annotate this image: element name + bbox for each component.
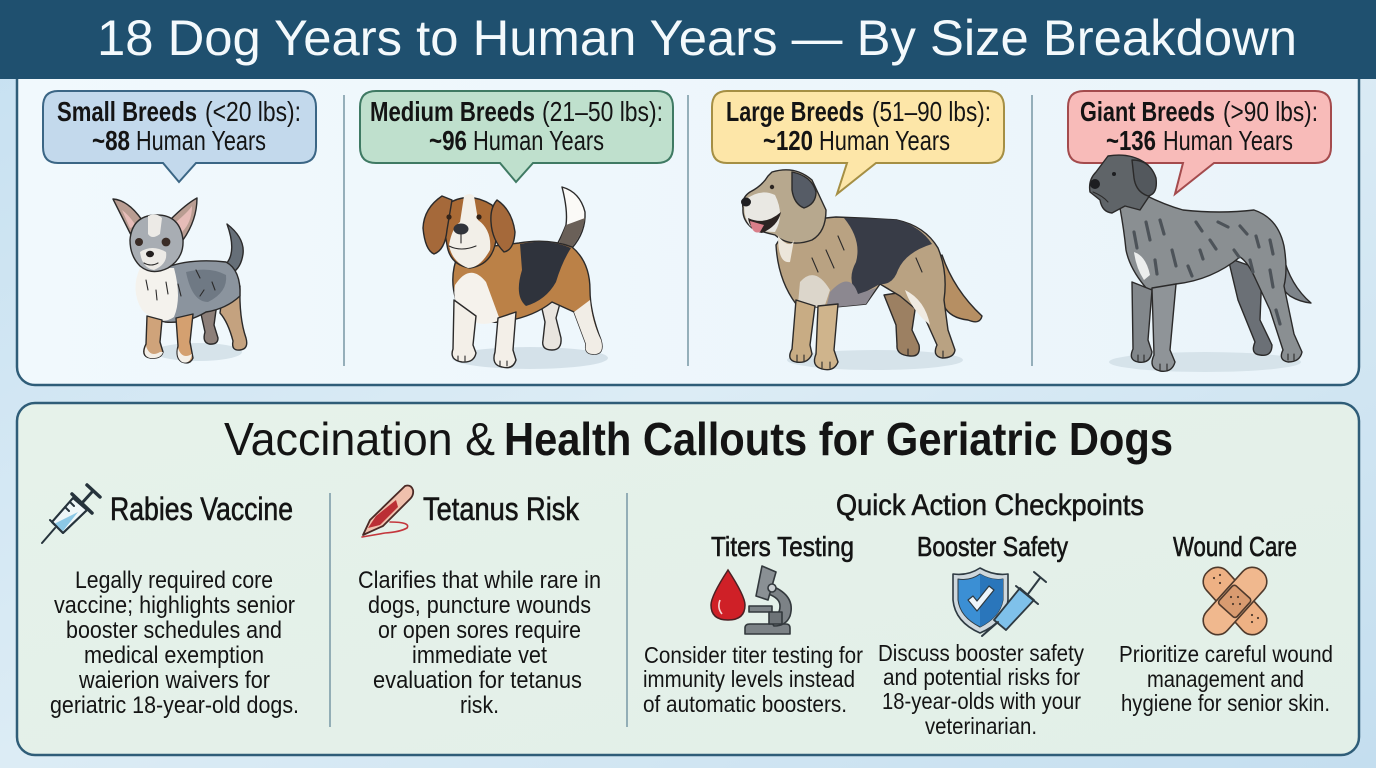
large breed bubble: Human Years [819, 125, 950, 156]
large breed bubble: Large Breeds [726, 96, 864, 127]
medium breed bubble [360, 91, 673, 182]
rabies text [50, 567, 299, 719]
giant breed bubble: Giant Breeds [1080, 96, 1215, 127]
panel heading [224, 413, 1173, 465]
title: 18 Dog Years to Human Years — By Size Breakdown [97, 10, 1297, 66]
wound care text [1119, 641, 1333, 716]
icon: tetanus wound [362, 486, 413, 537]
tetanus text: dogs, puncture wounds [368, 592, 591, 619]
wound care heading: Wound Care [1173, 531, 1297, 562]
booster safety heading: Booster Safety [917, 531, 1068, 562]
icon: blood drop [711, 570, 745, 620]
large breed bubble [712, 91, 1004, 194]
medium breed bubble: ~96 [429, 125, 467, 156]
booster text: and potential risks for [883, 664, 1080, 690]
icon: shield and syringe [953, 568, 1046, 636]
panel heading: Health Callouts for Geriatric Dogs [504, 413, 1173, 465]
icon: medium dog (beagle) [423, 187, 608, 369]
panel heading: Vaccination & [224, 413, 495, 465]
icon: rabies syringe [42, 485, 100, 543]
giant breed bubble: ~136 [1106, 125, 1156, 156]
tetanus text: evaluation for tetanus [373, 667, 582, 694]
wound care text: management and [1147, 666, 1304, 692]
large breed bubble: ~120 [763, 125, 813, 156]
booster text: 18-year-olds with your [882, 688, 1081, 714]
icon: microscope [745, 566, 791, 634]
rabies text: booster schedules and [66, 617, 282, 644]
giant breed bubble [1068, 91, 1331, 194]
small breed bubble [43, 91, 316, 182]
rabies text: vaccine; highlights senior [54, 592, 295, 619]
rabies text: geriatric 18-year-old dogs. [50, 692, 299, 719]
booster text [878, 640, 1084, 739]
small breed bubble: Human Years [136, 125, 266, 156]
titers text [643, 642, 863, 717]
tetanus text: or open sores require [378, 617, 581, 644]
icon: giant dog (great dane) [1090, 155, 1311, 372]
tetanus text: Clarifies that while rare in [358, 567, 601, 594]
rabies heading: Rabies Vaccine [110, 491, 293, 527]
panel: vaccination and health [17, 403, 1359, 755]
tetanus heading: Tetanus Risk [423, 491, 580, 527]
medium breed bubble: (21–50 lbs): [542, 96, 663, 127]
small breed bubble: Small Breeds [57, 96, 197, 127]
rabies text: medical exemption [84, 642, 264, 669]
titers text: immunity levels instead [643, 666, 855, 692]
giant breed bubble: Human Years [1163, 125, 1293, 156]
titers testing heading: Titers Testing [711, 531, 854, 562]
booster text: veterinarian. [925, 713, 1037, 739]
titers text: of automatic boosters. [643, 691, 847, 717]
small breed bubble: (<20 lbs): [205, 96, 301, 127]
header bar [0, 0, 1376, 79]
wound care text: hygiene for senior skin. [1121, 690, 1330, 716]
titers text: Consider titer testing for [644, 642, 863, 668]
large breed bubble: (51–90 lbs): [872, 96, 991, 127]
icon: crossed bandages [1198, 562, 1272, 640]
rabies text: waierion waivers for [78, 667, 270, 694]
icon: small dog (chihuahua) [113, 198, 247, 363]
tetanus text: immediate vet [412, 642, 547, 669]
tetanus text [358, 567, 601, 719]
panel: breed sizes [17, 50, 1359, 385]
medium breed bubble: Medium Breeds [370, 96, 535, 127]
quick action heading: Quick Action Checkpoints [836, 489, 1144, 522]
giant breed bubble: (>90 lbs): [1223, 96, 1318, 127]
rabies text: Legally required core [75, 567, 273, 594]
medium breed bubble: Human Years [473, 125, 604, 156]
wound care text: Prioritize careful wound [1119, 641, 1333, 667]
booster text: Discuss booster safety [878, 640, 1084, 666]
tetanus text: risk. [460, 692, 499, 719]
small breed bubble: ~88 [92, 125, 130, 156]
icon: large dog (shepherd mix) [741, 170, 982, 370]
